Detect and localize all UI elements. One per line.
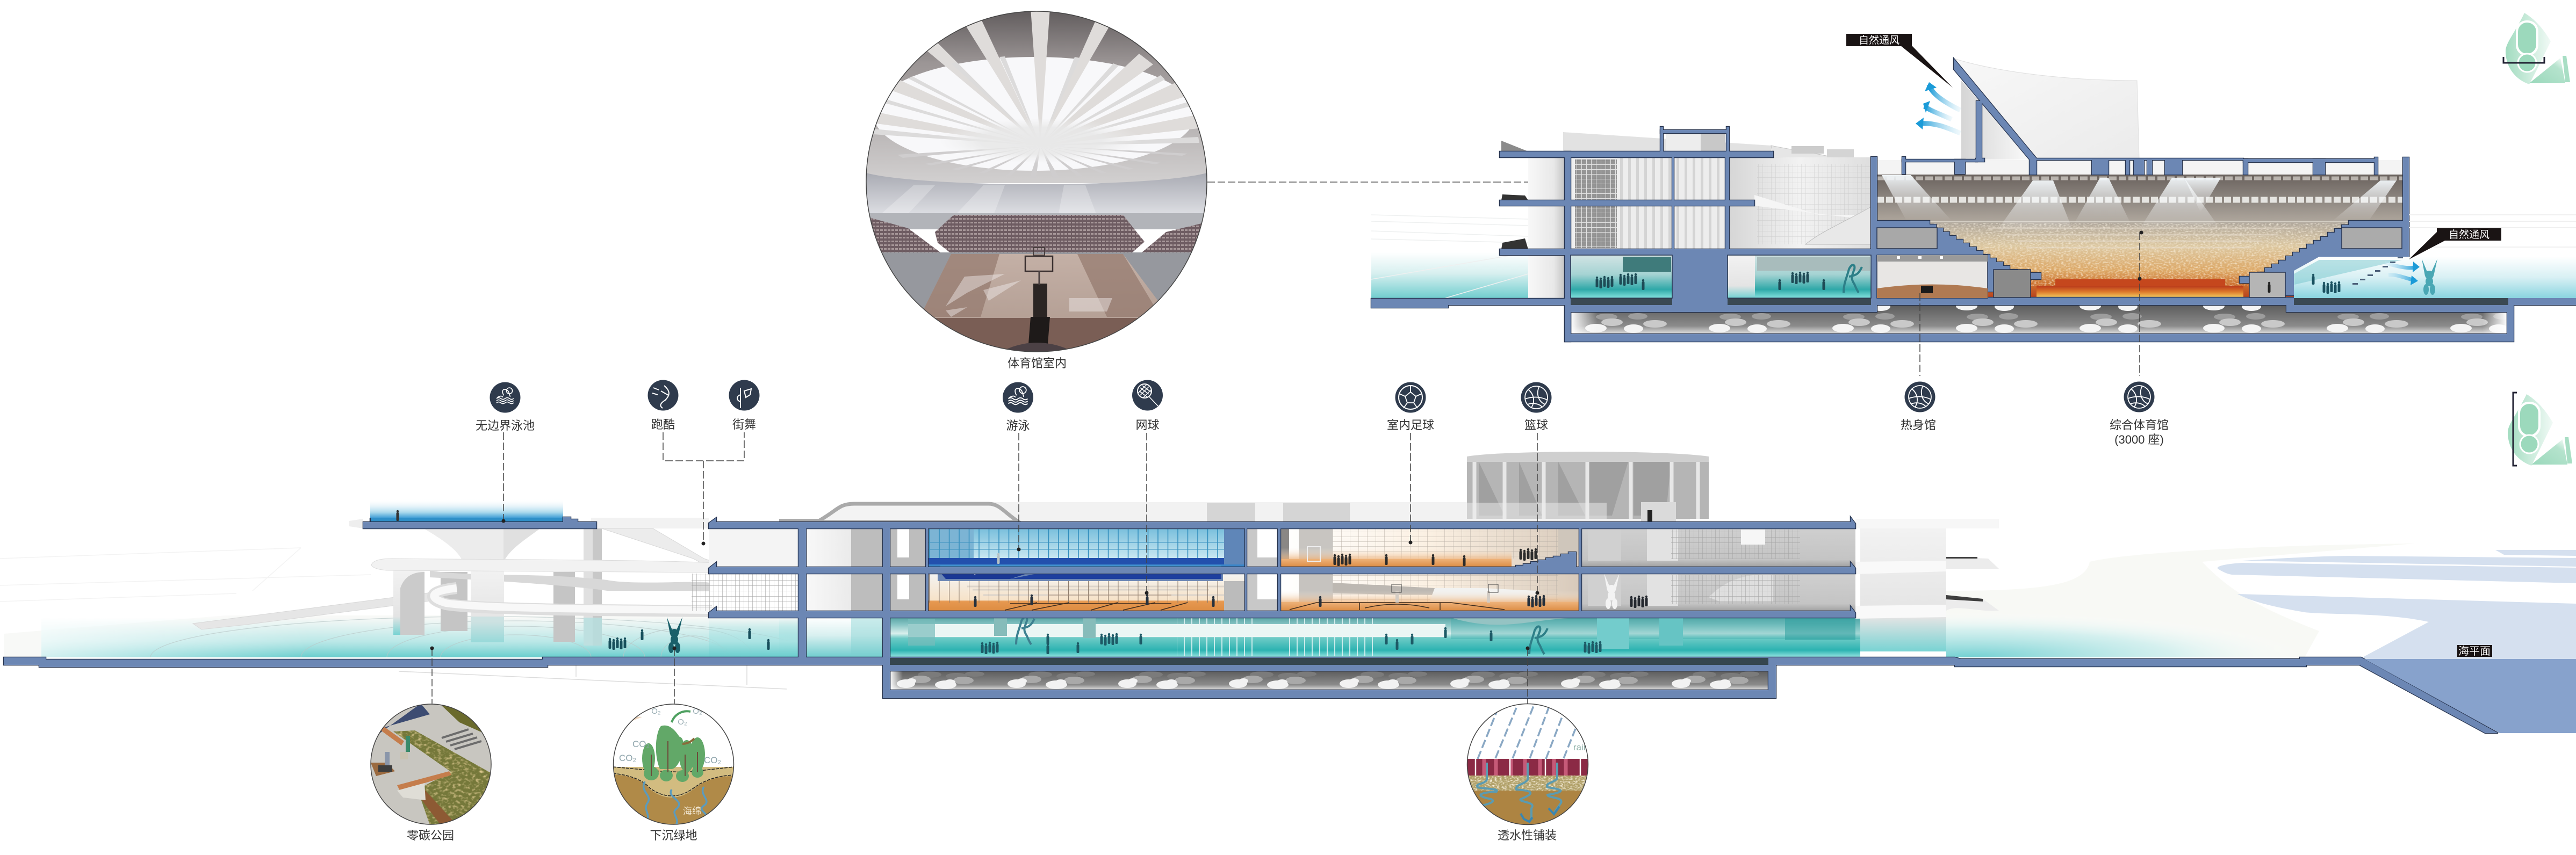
icon: warm-up hall: 热身馆: [1901, 418, 1936, 432]
callout: natural ventilation right: [2409, 228, 2501, 259]
icon: indoor soccer: [1387, 382, 1434, 432]
warm-up hall room: [1877, 228, 2402, 298]
key plan cut mark lower: [2513, 393, 2517, 466]
left block rooms: [1501, 157, 1871, 299]
swimming hall: [928, 528, 1245, 574]
landscape ground left: [1371, 215, 1565, 299]
indoor soccer hall: [1280, 528, 1579, 567]
icon: swimming: 游泳: [1006, 419, 1030, 432]
rooftop dome and roof items: [779, 502, 1690, 522]
detail circle: permeable paving: [1467, 704, 1588, 842]
white outer columns right wing: [1855, 519, 1999, 651]
detail circle: sunken green: O₂: [651, 707, 661, 716]
structure in section lower: [4, 517, 2498, 733]
detail circle: zero carbon park: [371, 704, 492, 842]
tennis hall: [928, 574, 1245, 611]
panel: upper section of gymnasium: [1371, 34, 2576, 342]
icon: infinity pool: 无边界泳池: [476, 419, 535, 432]
icon: comprehensive gym: [2110, 381, 2169, 446]
icon: street dance: 街舞: [732, 418, 756, 431]
basement rooms upper section: [1571, 255, 1871, 298]
detail circle: sunken green: O₂: [693, 707, 702, 716]
callout: natural ventilation top: 自然通风: [1859, 34, 1899, 46]
sea level block: 海平面: [2458, 645, 2491, 657]
leader dots: [430, 231, 2143, 650]
pool glow and deck: [349, 499, 709, 528]
sculptural columns and ramps: [193, 528, 800, 646]
leader lines: [432, 233, 2140, 704]
left building interior: [608, 528, 798, 657]
right rooms: [1581, 528, 1855, 611]
dark floor strip lower: [890, 658, 1768, 665]
structure in section, blue: [1371, 59, 2576, 342]
detail circle: permeable paving: rain: [1573, 742, 1588, 752]
panel: interior rendering circle: [866, 8, 1207, 370]
ocean and beach landscape: [1946, 544, 2576, 659]
detail circle: permeable paving: 透水性铺装: [1498, 829, 1557, 842]
structure fill: [1371, 59, 2576, 342]
detail circle: sunken green: CO₂: [632, 739, 650, 749]
icon: parkour: 跑酷: [651, 418, 675, 431]
detail circle: zero carbon park: 零碳公园: [407, 829, 454, 842]
wind arrows right: [2385, 263, 2417, 280]
icons and labels row: [476, 380, 2169, 446]
icon: comprehensive gym: 综合体育馆: [2110, 418, 2169, 432]
detail circle: sunken green: 下沉绿地: [650, 829, 697, 842]
detail circle: sunken green: 海绵: [683, 806, 701, 816]
covered plaza right: [2294, 215, 2576, 298]
panel: lower long section: [0, 452, 2576, 733]
stadium interior: [1877, 160, 2403, 298]
detail circle: sunken green: CO₂: [704, 755, 721, 765]
icon: comprehensive gym: (3000 座): [2114, 433, 2164, 446]
pool basin: [938, 566, 1223, 581]
parking level upper: [1571, 305, 2507, 334]
drum of sports hall: [1467, 452, 1709, 522]
structure fill lower: [4, 517, 2498, 733]
caption: 体育馆室内: [1008, 357, 1067, 370]
icon: basketball: [1521, 382, 1552, 432]
detail circle: sunken green: CO₂: [619, 753, 636, 763]
sea level block: [2364, 645, 2576, 733]
structure outline lower: [4, 517, 2498, 733]
icon: tennis: 网球: [1135, 418, 1160, 432]
basement columns and people: [1596, 256, 1870, 298]
icon: swimming: [1003, 382, 1033, 432]
key plan map lower: [2508, 394, 2572, 466]
dashed leader from interior circle to gym: [1207, 182, 2141, 233]
dark floor strips: [1571, 298, 2508, 305]
callout: natural ventilation top: [1846, 34, 1953, 88]
detail circle: sunken green: [613, 704, 734, 842]
sloping roof behind left block: [1501, 132, 1871, 186]
icon: infinity pool: [476, 382, 535, 432]
light beams: [1882, 175, 2397, 233]
icon: indoor soccer: 室内足球: [1387, 418, 1434, 432]
ground floor lobby with teal light: [890, 617, 1860, 657]
icon: street dance: [729, 380, 760, 431]
basketball hall: [1280, 574, 1579, 611]
ground floor rooms: [779, 528, 1278, 657]
left ground plaza: [0, 548, 817, 698]
icon: parkour: [648, 380, 678, 431]
icon: basketball: 篮球: [1524, 418, 1548, 432]
detail circle: sunken green: O₂: [678, 718, 687, 727]
icon: tennis: [1132, 380, 1163, 432]
wind arrows upper: [1916, 82, 1960, 133]
interior photo of gymnasium: [866, 8, 1207, 352]
key plan cut mark upper: [2503, 57, 2544, 63]
icon: warm-up hall: [1901, 381, 1936, 432]
callout: natural ventilation right: 自然通风: [2449, 229, 2489, 241]
parking level lower: [890, 671, 1768, 690]
sail roof: [1954, 59, 2139, 160]
key plan map upper: [2506, 13, 2570, 84]
structure outline: [1371, 59, 2576, 342]
